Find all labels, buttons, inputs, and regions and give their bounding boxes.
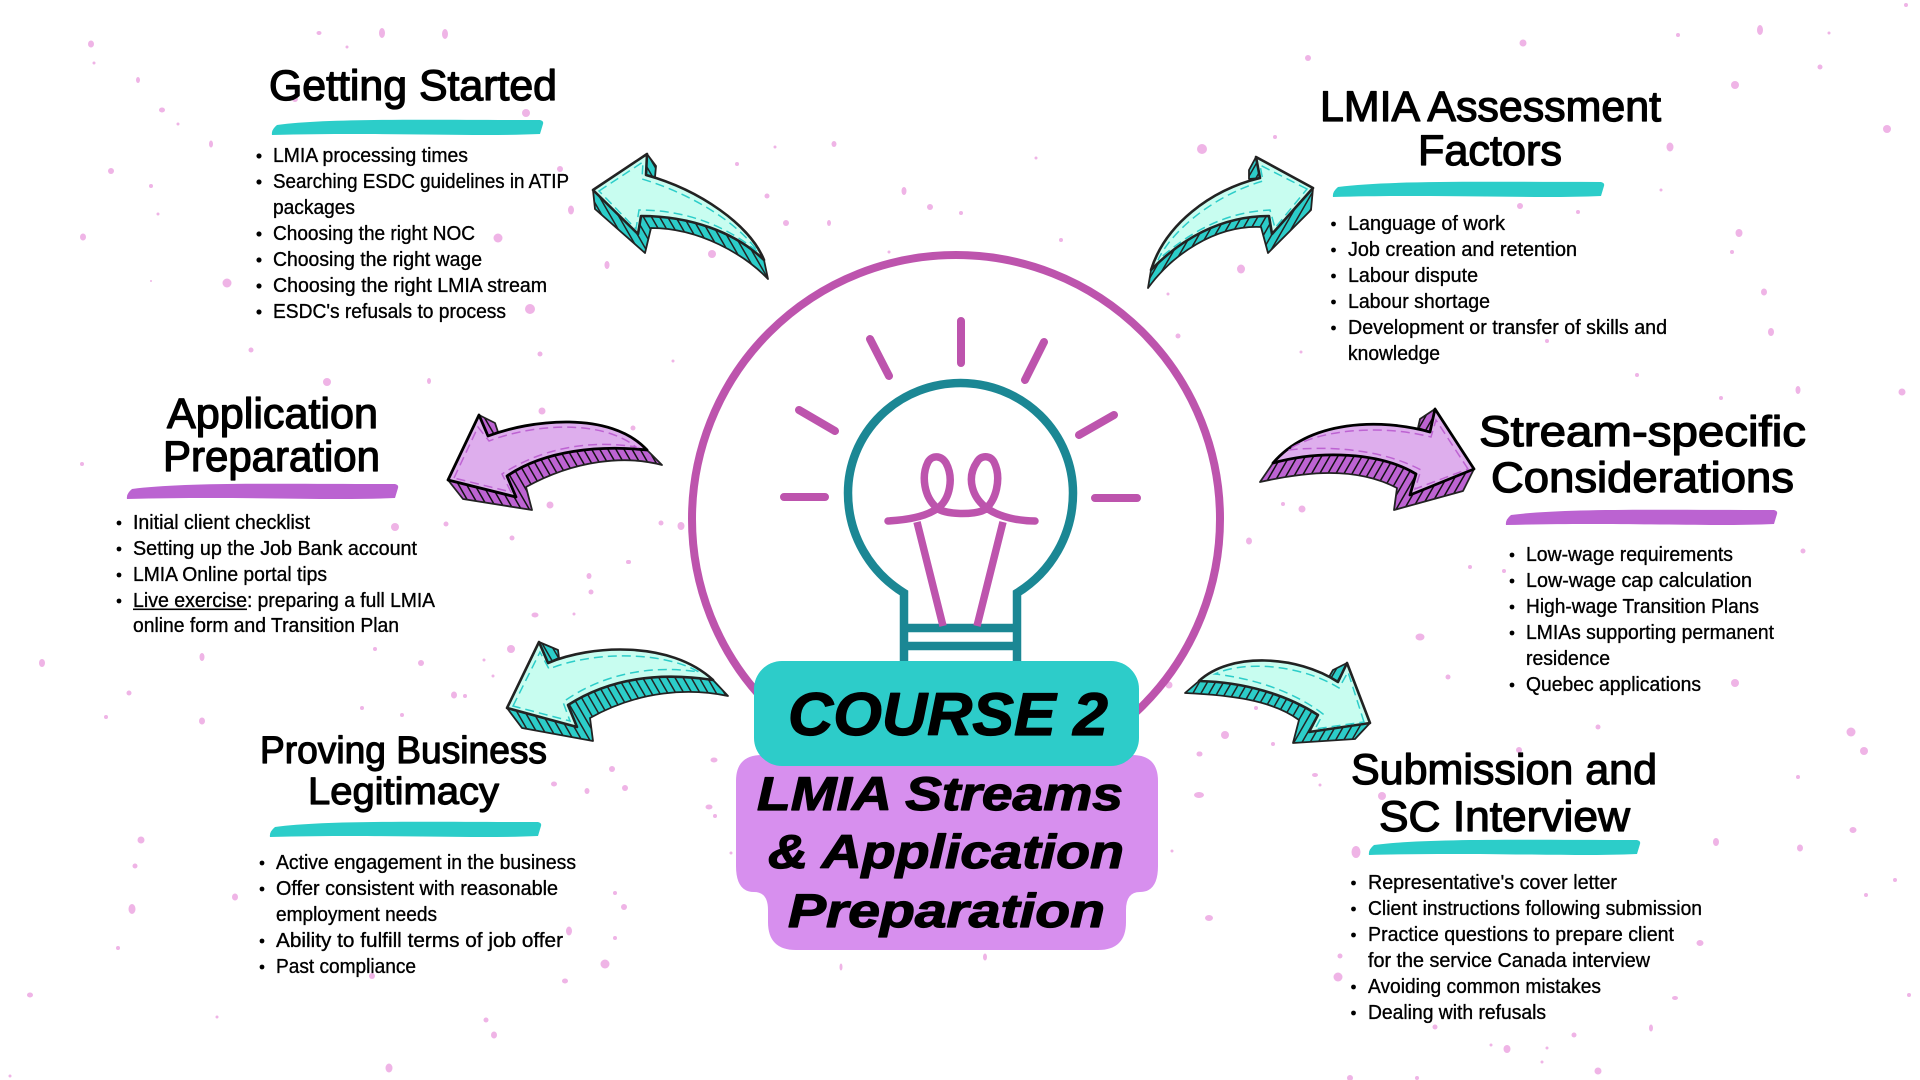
purple subtitle box — [736, 755, 1158, 950]
heading: Preparation — [163, 433, 380, 481]
purple underline — [1506, 510, 1777, 525]
bullet list: employment needs — [276, 904, 437, 926]
bullet list: Job creation and retention — [1348, 239, 1577, 261]
course title: Preparation — [788, 884, 1105, 937]
bullet list: Searching ESDC guidelines in ATIP — [273, 171, 569, 193]
heading: Getting Started — [269, 62, 557, 110]
bullet list — [257, 145, 569, 323]
bullet list: Setting up the Job Bank account — [133, 538, 417, 560]
light rays — [784, 321, 1137, 498]
bullet list: Labour shortage — [1348, 291, 1490, 313]
heading: Considerations — [1491, 454, 1794, 502]
icon: light bulb — [784, 321, 1137, 661]
course title: & Application — [768, 825, 1124, 878]
heading — [1351, 746, 1657, 841]
filament — [888, 457, 1035, 626]
bullet list: Language of work — [1348, 213, 1506, 235]
bullet list: Practice questions to prepare client — [1368, 924, 1674, 946]
bullet list: Avoiding common mistakes — [1368, 976, 1601, 998]
bullet list: Active engagement in the business — [276, 852, 576, 874]
panel: Stream-specific Considerations — [1479, 408, 1806, 696]
panel: Getting Started — [257, 62, 569, 323]
bullet list: Low-wage cap calculation — [1526, 570, 1752, 592]
bullet list: for the service Canada interview — [1368, 950, 1651, 972]
arrow: to Getting Started — [593, 154, 768, 279]
bullet list: Client instructions following submission — [1368, 898, 1702, 920]
bullet list — [1351, 872, 1702, 1024]
bullet list — [1331, 213, 1667, 365]
bullet list: ESDC's refusals to process — [273, 301, 506, 323]
bullet list: Development or transfer of skills and — [1348, 317, 1667, 339]
heading — [1320, 83, 1661, 175]
heading — [163, 390, 380, 481]
course number: COURSE 2 — [788, 681, 1108, 748]
bullet list: LMIAs supporting permanent — [1526, 622, 1774, 644]
bulb glass outline and base — [848, 383, 1073, 661]
bullet list: Choosing the right NOC — [273, 223, 475, 245]
bullet list: Low-wage requirements — [1526, 544, 1733, 566]
panel: Submission and SC Interview — [1351, 746, 1702, 1024]
bullet list: Ability to fulfill terms of job offer — [276, 930, 563, 952]
course title — [757, 767, 1124, 937]
teal underline — [1369, 840, 1640, 855]
big purple circle behind the bulb — [692, 255, 1220, 783]
heading: LMIA Assessment — [1320, 83, 1661, 131]
bullet list: Choosing the right wage — [273, 249, 482, 271]
teal underline — [272, 120, 543, 135]
heading: Submission and — [1351, 746, 1657, 794]
purple underline — [127, 484, 398, 499]
heading: Application — [167, 390, 378, 438]
bullet list: online form and Transition Plan — [133, 615, 399, 637]
bullet list: High-wage Transition Plans — [1526, 596, 1759, 618]
bullet list: Initial client checklist — [133, 512, 310, 534]
heading — [1479, 408, 1806, 502]
arrow: to Application Preparation — [448, 415, 662, 510]
heading: Factors — [1418, 127, 1562, 175]
bullet list — [260, 852, 576, 978]
bullet list — [1510, 544, 1774, 696]
bullet list: Representative's cover letter — [1368, 872, 1617, 894]
bullet list: Live exercise — [133, 590, 247, 612]
teal course box — [754, 661, 1139, 766]
heading: Stream-specific — [1479, 408, 1806, 456]
bullet list: residence — [1526, 648, 1610, 670]
bullet list: Quebec applications — [1526, 674, 1701, 696]
panel: LMIA Assessment Factors — [1320, 83, 1667, 365]
heading: Legitimacy — [308, 771, 499, 813]
bullet list: Labour dispute — [1348, 265, 1478, 287]
bullet list: Choosing the right LMIA stream — [273, 275, 547, 297]
panel: Proving Business Legitimacy — [260, 730, 576, 978]
teal underline — [1333, 182, 1604, 197]
bullet list: packages — [273, 197, 355, 219]
heading — [260, 730, 547, 813]
bullet list: Dealing with refusals — [1368, 1002, 1546, 1024]
title panel: Course 2 — [736, 661, 1158, 950]
bullet list: : preparing a full LMIA — [247, 590, 436, 612]
arrow: to Submission and SC Interview — [1185, 660, 1370, 743]
bullet list: Offer consistent with reasonable — [276, 878, 558, 900]
bullet list: LMIA Online portal tips — [133, 564, 327, 586]
heading: SC Interview — [1379, 793, 1631, 841]
bullet list: Past compliance — [276, 956, 416, 978]
arrow: to Stream-specific Considerations — [1260, 409, 1474, 510]
bullet list: knowledge — [1348, 343, 1440, 365]
bullet list — [117, 512, 436, 637]
arrow: to Proving Business Legitimacy — [507, 642, 728, 741]
panel: Application Preparation — [117, 390, 436, 637]
arrow: to LMIA Assessment Factors — [1148, 157, 1313, 288]
bullet list: LMIA processing times — [273, 145, 468, 167]
heading: Proving Business — [260, 730, 547, 772]
course title: LMIA Streams — [757, 767, 1123, 820]
teal underline — [270, 822, 541, 837]
